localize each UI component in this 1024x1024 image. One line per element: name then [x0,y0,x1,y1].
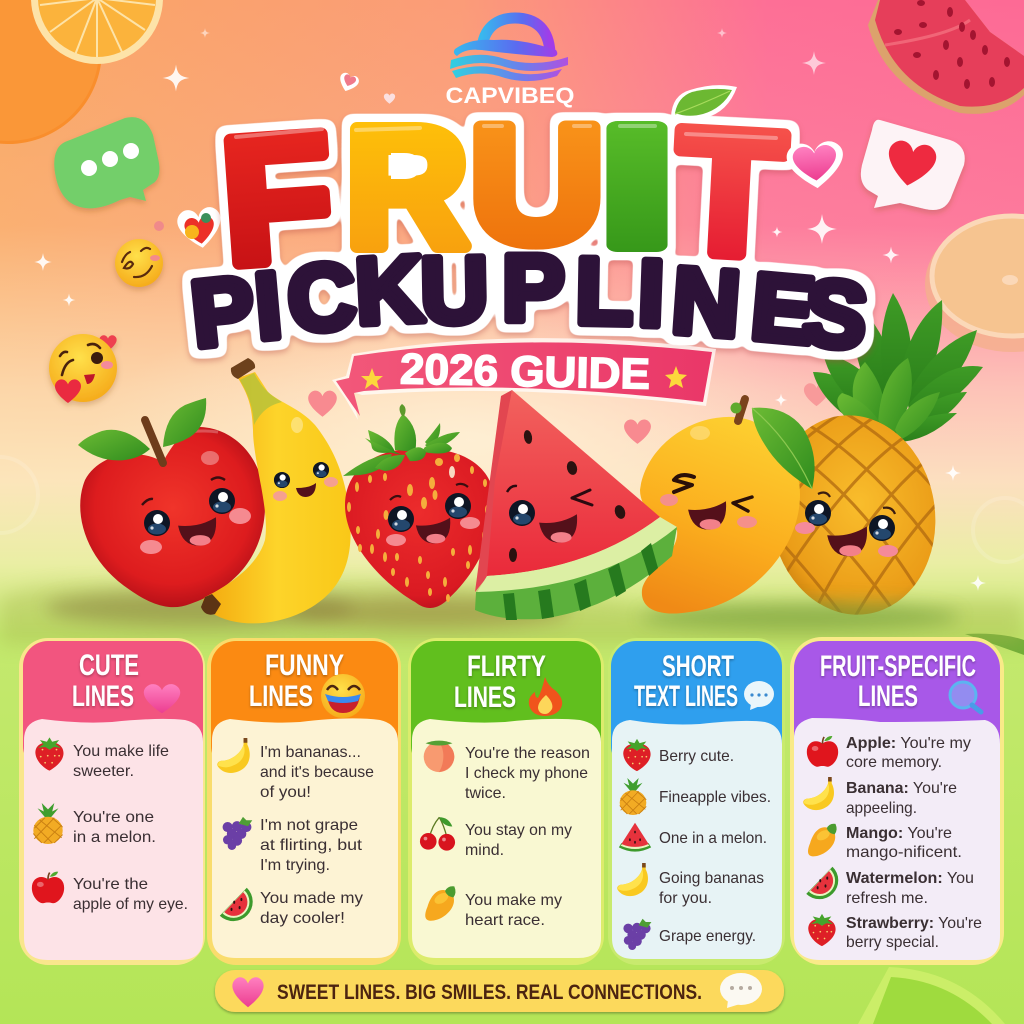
icon: speech bubble [744,681,774,710]
line: strawberry: berry special. [846,934,939,951]
line: check my phone: You're the reason [465,745,590,762]
line: sweeter: sweeter. [73,763,134,780]
panel: funny lines [207,638,401,965]
line: watermelon: Watermelon: You [846,870,974,887]
decoration: pale circles [0,457,1024,562]
line: banana: appeeling. [846,800,917,817]
line: apple: Apple: You're my [846,735,971,752]
title: FRUIT and PICKUP LINES: U [470,92,604,276]
logo [446,18,574,108]
ground shadow [0,583,1024,645]
line: apple of my eye: You're the [73,876,148,893]
line: bananas [217,738,374,801]
line: check my phone: twice. [465,785,506,802]
heading: fruit-specific lines [820,650,976,713]
line: grape: at flirting, but [260,837,363,854]
line: mango: Mango: You're [846,825,952,842]
heading: funny lines [249,649,344,713]
heading: flirty lines [454,650,546,714]
logo: CAPVIBEQ [446,83,574,108]
line: fineapple vibes: Fineapple vibes. [659,789,771,806]
footer banner [215,970,784,1012]
fruit: mango [640,399,815,614]
line: strawberry: Strawberry: You're [846,915,982,932]
line: apple of my eye: apple of my eye. [73,896,188,913]
line: one in a melon: You're one [73,809,154,826]
heading: short text lines: TEXT LINES [634,680,738,713]
chat bubble: white with heart [861,120,965,210]
line: sweeter: You make life [73,743,169,760]
sticker heart [176,206,224,251]
icon: pink heart [144,684,180,713]
line: one in a melon: One in a melon. [659,830,767,847]
title: FRUIT and PICKUP LINES: F [216,95,338,302]
title highlights [236,126,776,138]
heading: flirty lines: FLIRTY [467,650,546,683]
title: FRUIT and PICKUP LINES: R [346,93,468,283]
footer text: SWEET LINES. BIG SMILES. REAL CONNECTIONS. [277,981,702,1004]
line: bananas: of you! [260,784,311,801]
line: one in a melon: in a melon. [73,829,156,846]
line: apple [807,735,971,771]
line: sweeter [35,737,169,780]
line: cooler: You made my [260,890,363,907]
line: heart race: You make my [465,892,562,909]
small hearts [154,71,829,444]
face: pineapple [795,493,898,557]
decoration: faded citrus [925,216,1024,352]
heading: funny lines: FUNNY [265,649,344,682]
title: FRUIT and PICKUP LINES [186,92,872,369]
line: stay on my mind: You stay on my [465,822,572,839]
line: cooler [220,888,363,927]
line: one in a melon [619,823,767,852]
line: bananas: and it's because [260,764,374,781]
icon: fire [529,677,562,716]
title: FRUIT and PICKUP LINES: PICKUP LINES [186,235,872,369]
icon: chat bubble [720,973,762,1008]
panel: short text lines [608,638,785,965]
panel: fruit-specific lines [790,637,1004,965]
banner: 2026 guide: 2026 GUIDE [399,345,650,399]
heading: fruit-specific lines: LINES [858,680,918,713]
line: grape: I'm not grape [260,817,358,834]
line: grape energy: Grape energy. [659,928,756,945]
panel: cute lines [19,638,205,965]
title: FRUIT and PICKUP LINES: I [600,92,674,282]
icon: laughing emoji [321,674,365,718]
line: bananas: I'm bananas... [260,744,361,761]
line: check my phone [424,741,590,802]
sparkles [34,28,986,591]
line: grape energy [623,919,756,950]
line: watermelon [806,867,974,907]
heading: cute lines: LINES [72,680,134,713]
leaf on title [671,85,737,120]
line: grape [223,817,363,874]
fruit: strawberry [343,404,493,608]
line: grape: I'm trying. [260,857,330,874]
heading: funny lines: LINES [249,680,313,713]
panel: flirty lines [408,638,604,965]
line: check my phone: I check my phone [465,765,588,782]
decoration: lime slice [858,634,1024,1024]
fruit: apple [78,398,265,607]
line: berry cute: Berry cute. [659,748,734,765]
line: mango: mango-nificent. [846,844,962,861]
line: heart race: heart race. [465,912,545,929]
line: stay on my mind [420,817,572,859]
emoji: winking smile [115,239,163,287]
fruit: watermelon [475,390,677,620]
icon: magnifying glass [950,682,981,712]
line: going bananas: Going bananas [659,870,764,887]
line: apple: core memory. [846,754,942,771]
line: watermelon: refresh me. [846,890,928,907]
R counter [391,153,420,179]
line: stay on my mind: mind. [465,842,504,859]
line: mango [808,824,962,861]
line: going bananas: for you. [659,890,712,907]
heading: flirty lines: LINES [454,681,516,714]
fruit: banana [201,358,351,623]
heading: cute lines: CUTE [79,649,139,682]
line: apple of my eye [32,872,188,913]
line: banana: Banana: You're [846,780,957,797]
line: fineapple vibes [620,778,771,815]
icon: pink heart [232,977,264,1007]
fruit: pineapple [780,293,983,615]
heading: cute lines [72,649,139,713]
heart beside title [786,140,846,191]
line: cooler: day cooler! [260,910,345,927]
line: heart race [425,886,562,929]
decoration: orange slices [0,0,163,144]
line: banana [803,777,957,817]
chat bubble: green [54,117,159,208]
heading: short text lines: SHORT [662,650,734,683]
emoji: kissing heart face [49,334,117,403]
banner: 2026 guide [332,338,716,420]
line: strawberry [808,914,982,951]
heading: short text lines [634,650,738,713]
line: going bananas [617,863,764,907]
title: FRUIT and PICKUP LINES: T [671,93,788,294]
line: one in a melon [33,803,156,846]
decoration: watermelon slice [868,0,1024,114]
line: berry cute [623,739,734,771]
